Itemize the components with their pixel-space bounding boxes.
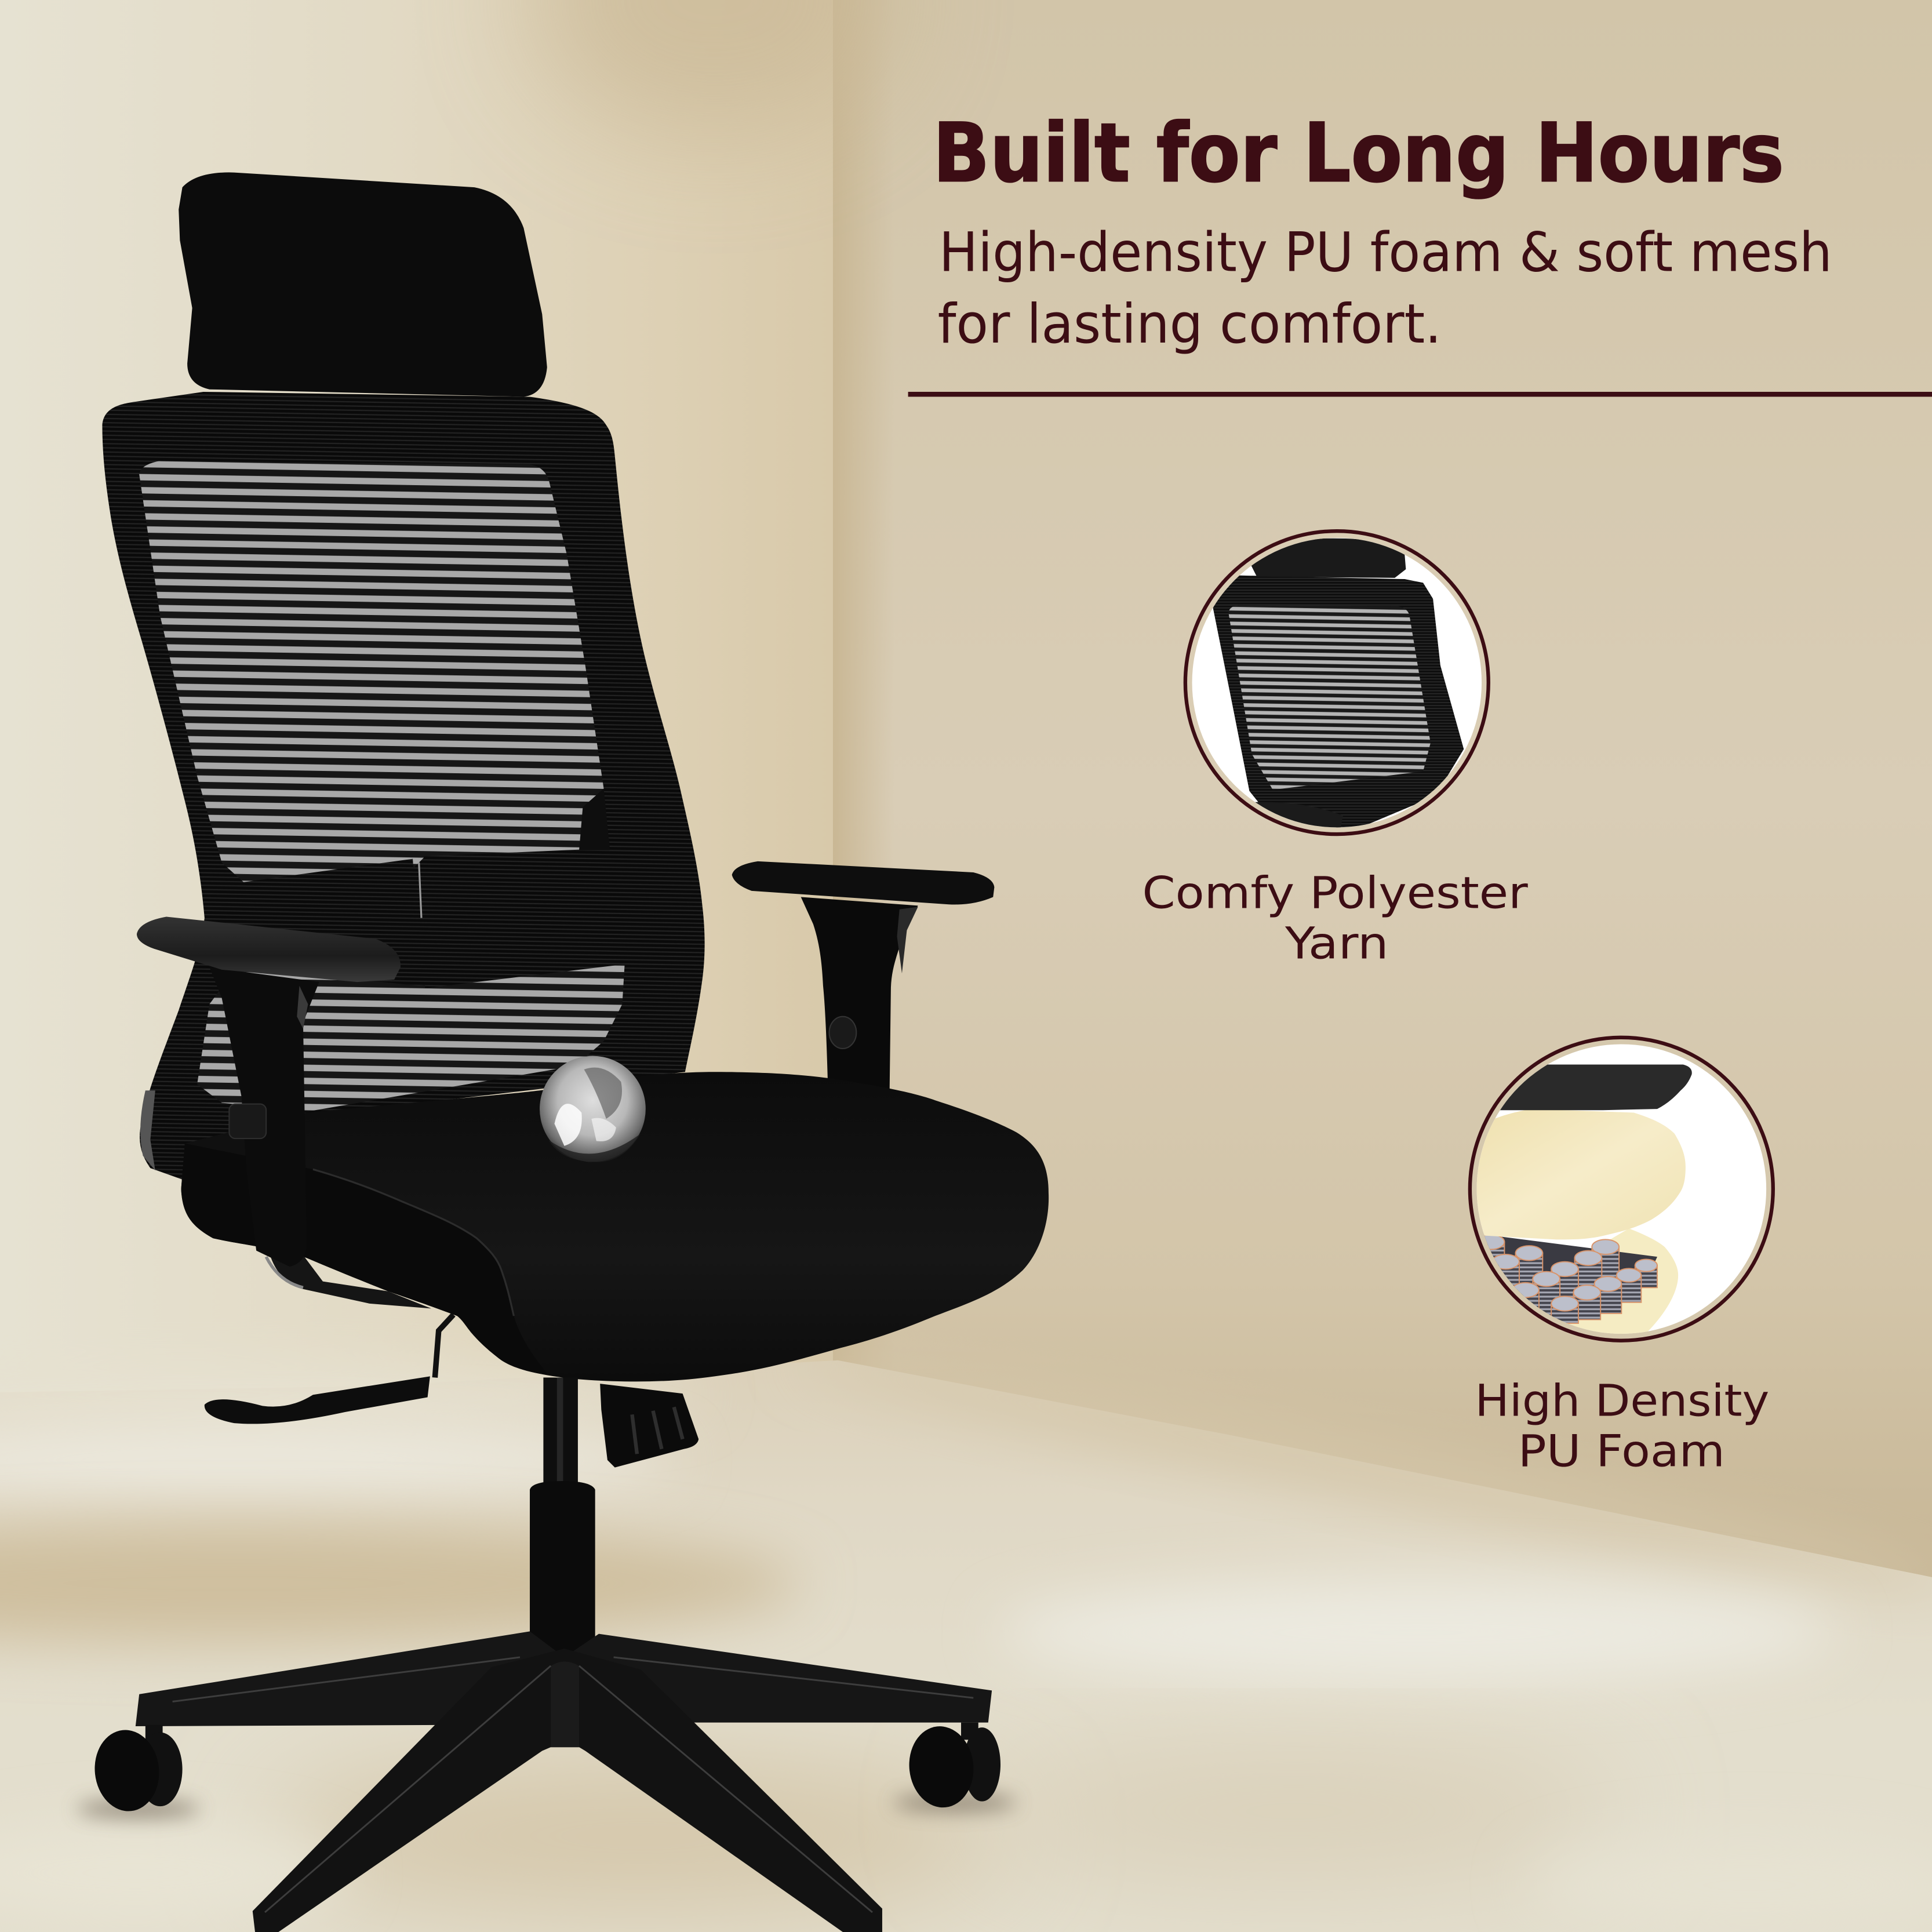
- gas rod: [543, 1377, 578, 1489]
- label: [1475, 1375, 1769, 1477]
- seat cushion: [181, 1072, 1049, 1381]
- knob: [600, 1384, 698, 1468]
- chair: [77, 172, 1049, 1932]
- circle: foam layers: [1467, 1038, 1773, 1343]
- left caster: [91, 1725, 183, 1814]
- gas cylinder: [530, 1481, 595, 1658]
- backrest: [102, 392, 705, 1180]
- caster shadows: [77, 1794, 1017, 1817]
- label: High Density: [1475, 1375, 1769, 1426]
- label: Yarn: [1285, 918, 1389, 969]
- headrest: [179, 172, 547, 396]
- callout: high density pu foam: [1467, 1038, 1773, 1477]
- right armrest: [732, 861, 994, 1089]
- label: Comfy Polyester: [1142, 868, 1529, 919]
- mechanism and lever: [205, 1251, 453, 1424]
- left armrest: [137, 916, 401, 1267]
- subheading: [938, 221, 1832, 356]
- callout: comfy polyester yarn: [1142, 531, 1529, 969]
- label: [1142, 868, 1529, 969]
- heading: Built for Long Hours: [933, 106, 1784, 201]
- lumbar pad: [243, 847, 631, 988]
- mesh panel: [139, 461, 604, 885]
- label: PU Foam: [1518, 1426, 1725, 1477]
- subheading: for lasting comfort.: [938, 293, 1442, 356]
- five star legs: [136, 1631, 992, 1747]
- lower mesh: [197, 963, 625, 1111]
- chrome ball: [540, 1056, 646, 1162]
- circle: mesh close-up: [1185, 531, 1489, 834]
- right caster: [905, 1723, 1000, 1811]
- base: [91, 1377, 1000, 1932]
- subheading: High-density PU foam & soft mesh: [939, 221, 1832, 285]
